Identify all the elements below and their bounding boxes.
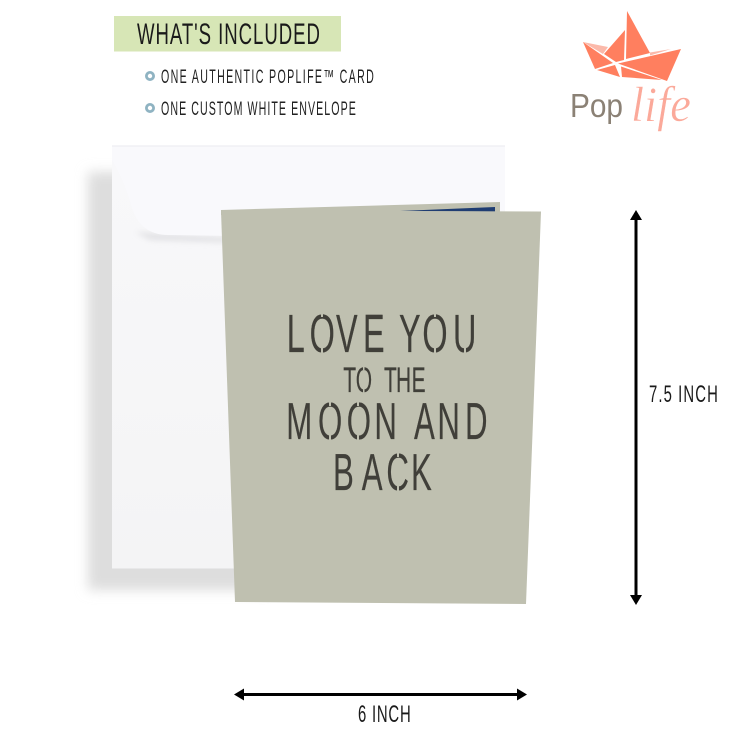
inner navy sliver — [400, 207, 495, 212]
envelope body — [112, 146, 505, 568]
label: 7.5 inch: 7.5 INCH — [649, 382, 718, 408]
envelope flap — [112, 146, 505, 236]
greeting card — [221, 202, 541, 604]
card message: MOON AND — [286, 393, 488, 451]
flap shadow — [135, 232, 240, 243]
wordmark: life: life — [631, 76, 691, 132]
bullet item: envelope: ONE CUSTOM WHITE ENVELOPE — [161, 99, 356, 120]
card message: TO THE — [343, 362, 426, 400]
logo: Poplife — [570, 11, 691, 132]
envelope shadow — [88, 172, 268, 590]
envelope — [88, 146, 505, 590]
card back panel — [221, 202, 500, 215]
icon: origami boat — [583, 11, 681, 81]
heading: what's included: WHAT'S INCLUDED — [137, 18, 320, 51]
card message: LOVE YOU — [287, 305, 476, 364]
arrow: height dimension — [630, 210, 642, 605]
stencil cuts — [321, 311, 466, 492]
list of included items — [146, 67, 374, 120]
label: 6 inch: 6 INCH — [358, 702, 411, 728]
card front panel — [221, 211, 541, 604]
wordmark: Pop: Pop — [570, 87, 623, 124]
bullet item: card: ONE AUTHENTIC POPLIFE™ CARD — [161, 67, 374, 88]
arrow: width dimension — [234, 688, 527, 700]
card message: BACK — [333, 444, 432, 502]
card message — [286, 305, 488, 502]
